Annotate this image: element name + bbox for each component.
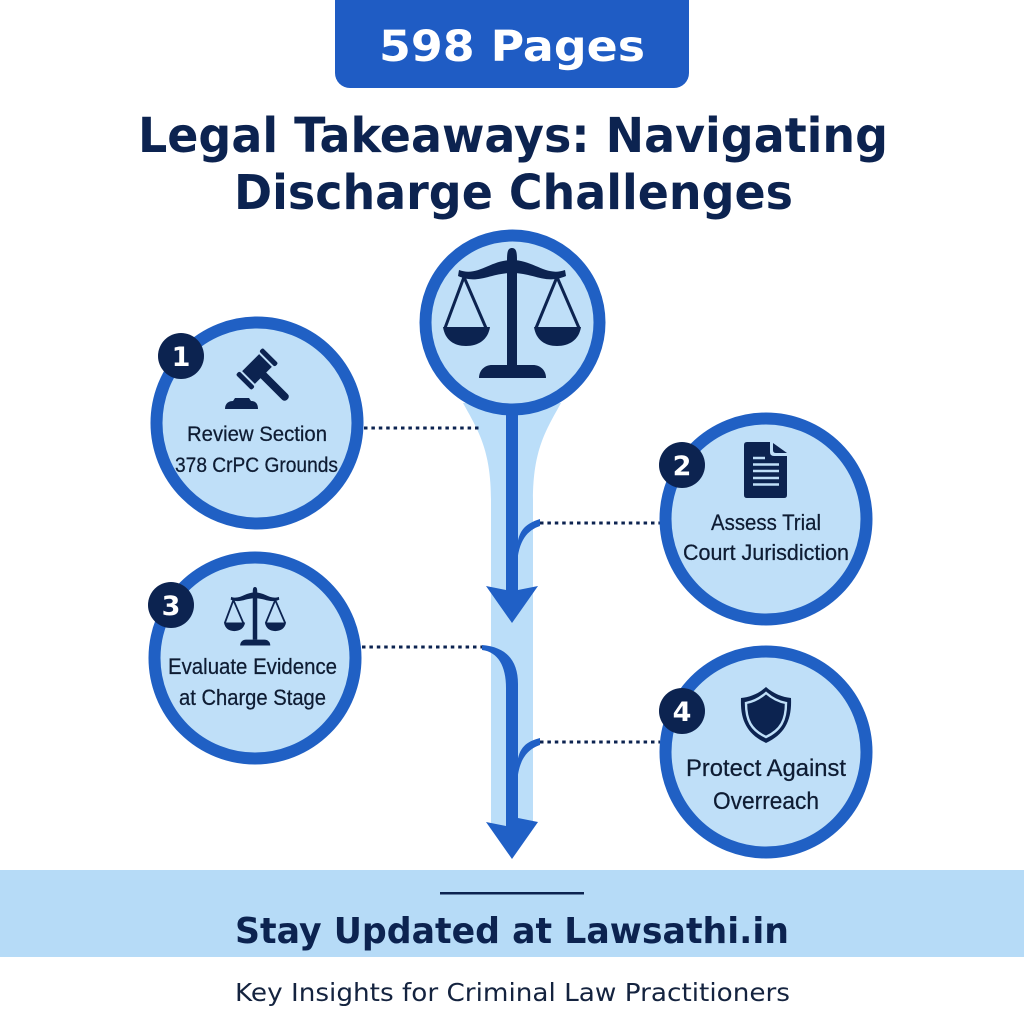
label: evaluate evidence [168,654,337,710]
icon: gavel [225,348,301,413]
panel: takeaway 3 [148,558,356,758]
badge 4: 4 [673,697,691,728]
label: review section: Review Section [187,422,327,446]
central flow stem with arrows [463,403,561,859]
icon: shield [741,687,791,743]
badge 4 [659,688,705,734]
label: protect against overreach: Protect Against [686,755,846,782]
header pill: page count: 598 Pages [379,22,645,72]
panel: takeaway 4 [659,652,866,852]
footer band: Stay Updated at Lawsathi.in [235,911,789,952]
panel: takeaway 2 [659,418,866,620]
title: Legal Takeaways: Navigating [138,108,888,164]
badge 2 [659,442,705,488]
label: protect against overreach: Overreach [713,788,819,815]
icon: small scales [224,587,286,646]
label: evaluate evidence: Evaluate Evidence [168,654,337,679]
badge 2: 2 [673,451,691,482]
badge 1: 1 [172,342,190,373]
label: review section: 378 CrPC Grounds [175,453,338,477]
dotted connector: takeaway 1 [364,426,482,430]
title: Discharge Challenges [234,165,793,221]
label: evaluate evidence: at Charge Stage [179,685,326,710]
central scales medallion [426,236,600,410]
dotted connector: takeaway 3 [362,646,482,648]
label: protect against overreach [686,755,846,815]
dotted connector: takeaway 2 [540,522,660,524]
label: assess jurisdiction: Assess Trial [711,510,821,535]
header pill: page count [335,0,689,88]
label: review section [175,422,338,477]
icon: document [744,442,787,498]
label: assess jurisdiction [683,510,849,565]
dotted connector: takeaway 4 [540,740,660,744]
footer tagline: Key Insights for Criminal Law Practitioners [235,978,790,1007]
badge 1 [158,333,204,379]
badge 3 [148,582,194,628]
icon: scales of justice [443,248,581,378]
panel: takeaway 1 [156,322,358,524]
footer band [0,870,1024,957]
title [138,108,888,221]
badge 3: 3 [162,591,180,622]
label: assess jurisdiction: Court Jurisdiction [683,540,849,565]
